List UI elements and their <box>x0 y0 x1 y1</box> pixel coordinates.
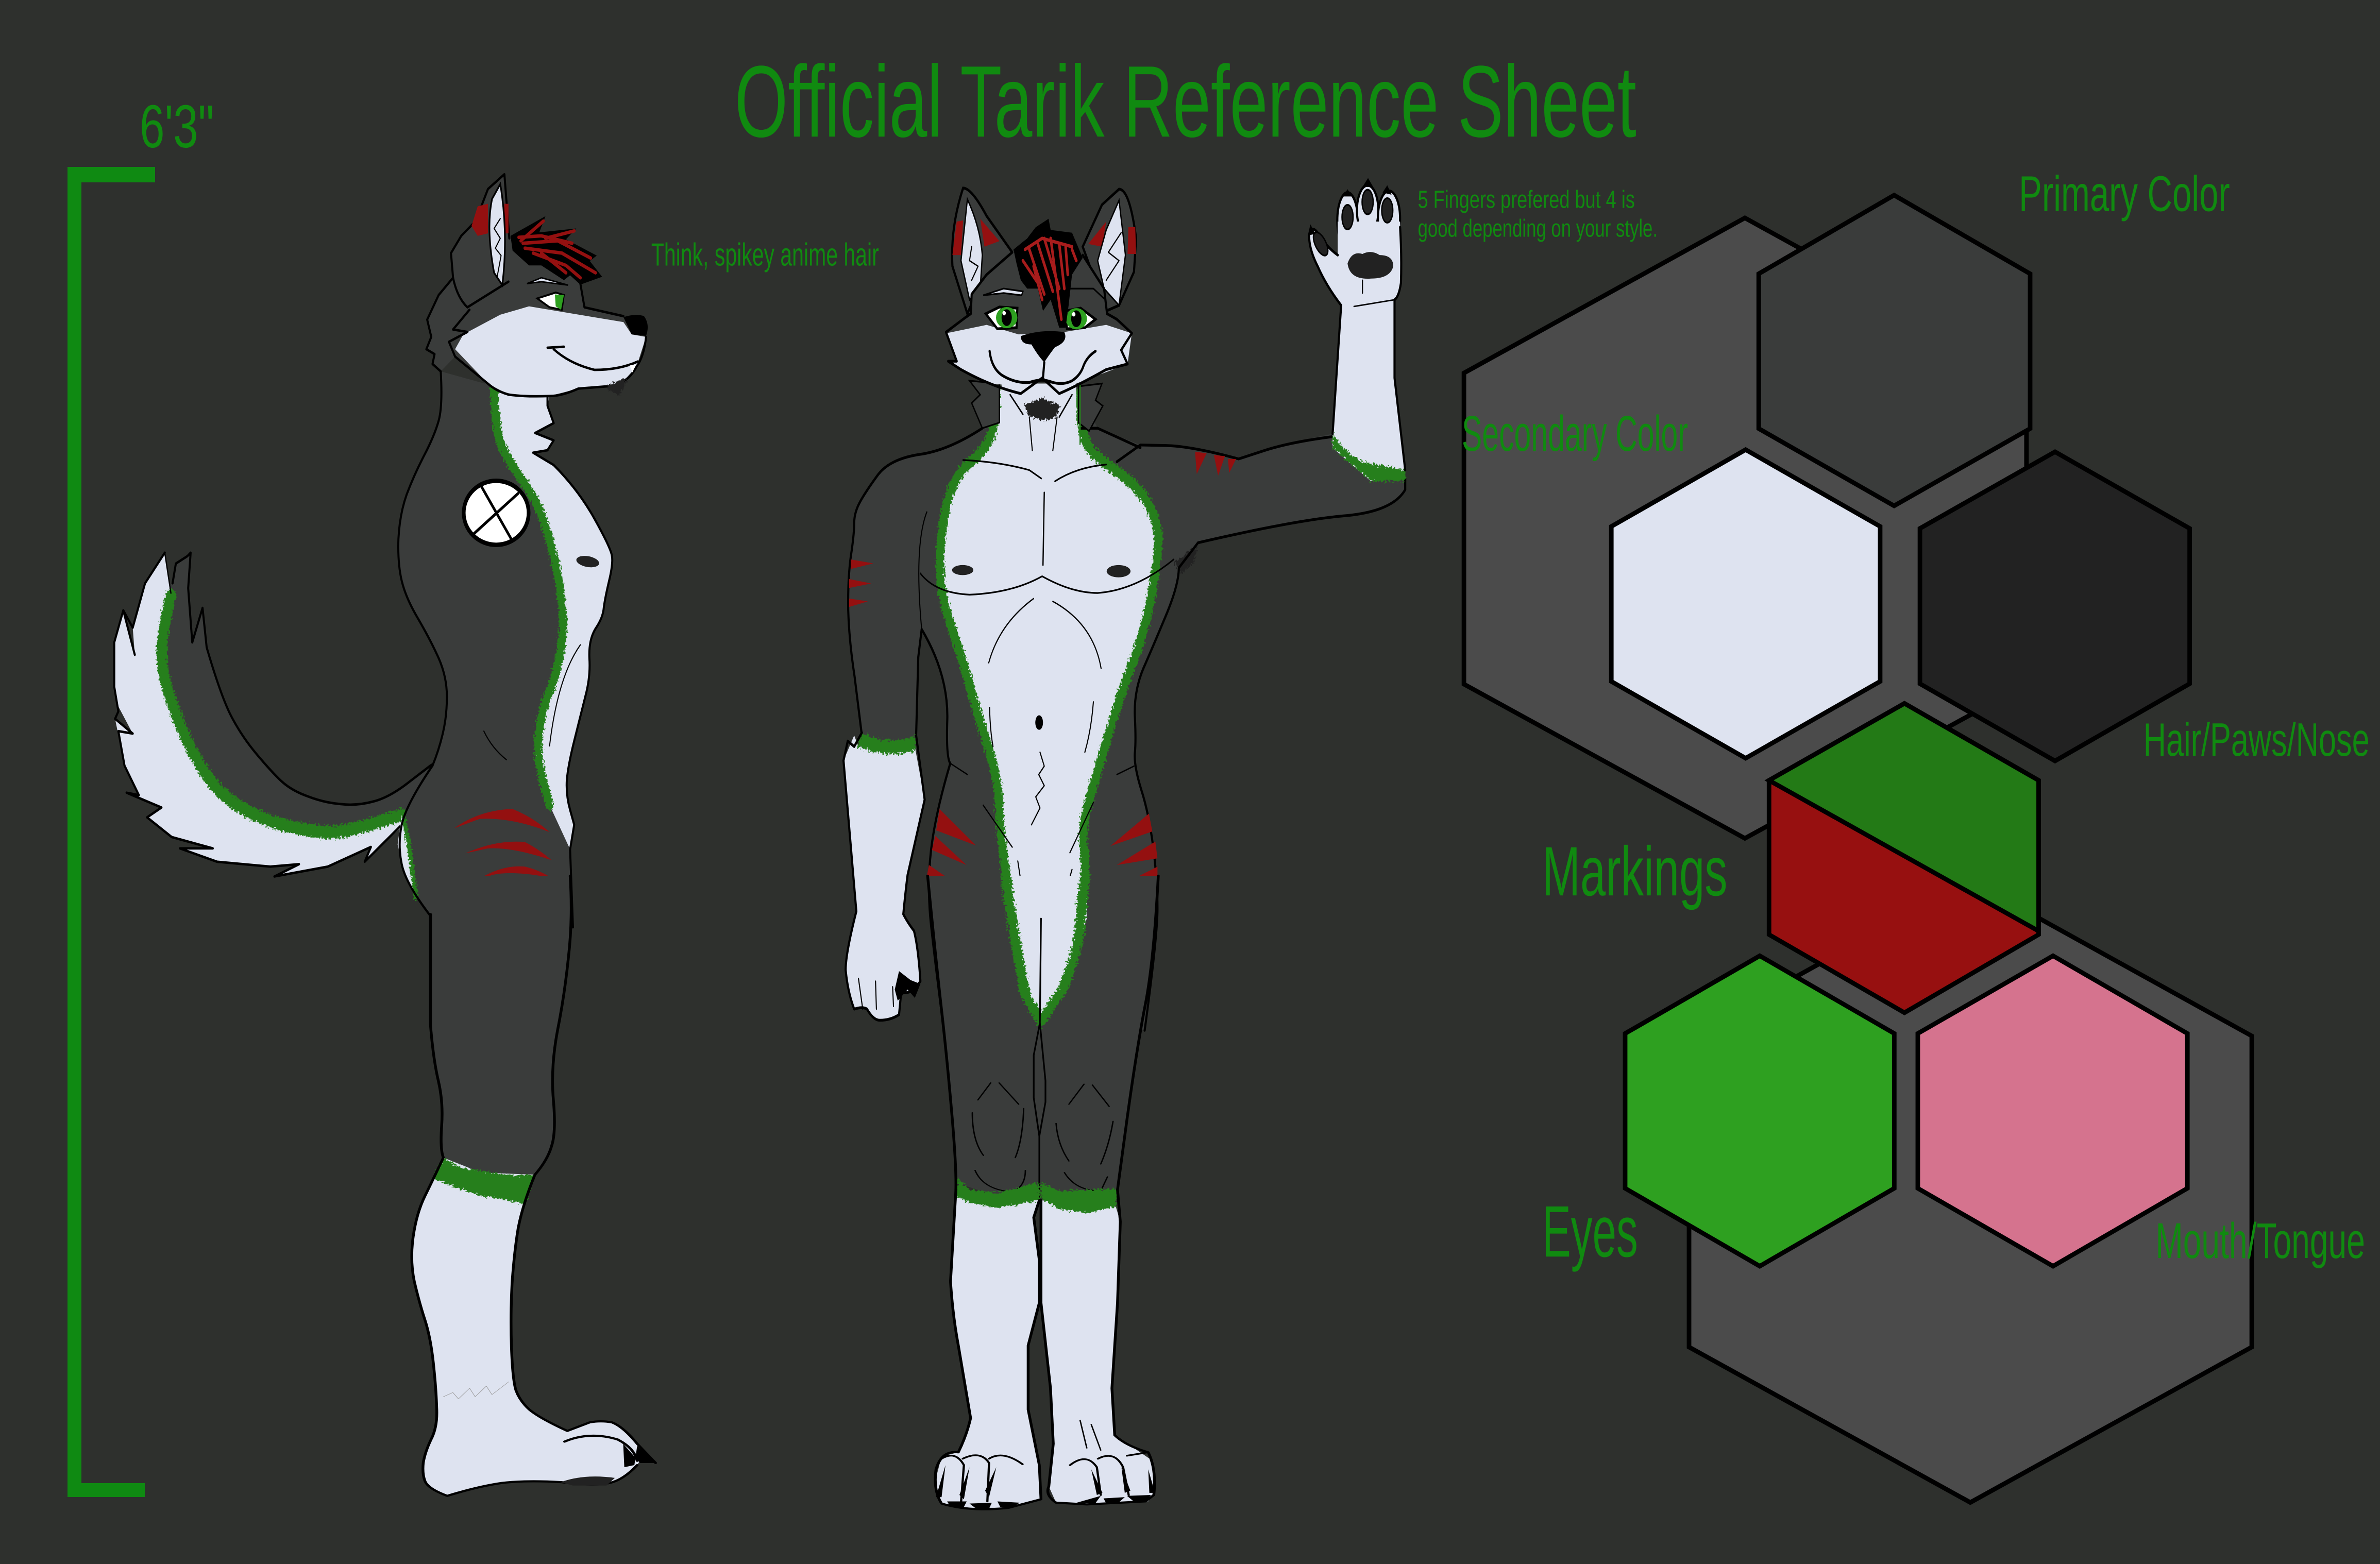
right ear <box>1083 189 1136 311</box>
neck fur left and right <box>970 381 1103 431</box>
hexagon: hair paws nose <box>1920 452 2190 761</box>
front raised forearm and paw <box>1308 178 1405 481</box>
paw claws <box>1308 178 1392 235</box>
side view torso <box>398 371 612 927</box>
front legs <box>927 876 1158 1509</box>
front hair <box>1014 219 1083 328</box>
hexagon: primary colour <box>1759 195 2030 506</box>
side eye <box>527 278 568 310</box>
side goatee <box>607 379 627 395</box>
side view head <box>426 174 648 396</box>
front toes and claws <box>936 1420 1155 1509</box>
palette labels <box>1462 165 2370 1272</box>
side red scratches <box>454 809 552 883</box>
side hair <box>511 216 602 285</box>
note: fingers: good depending on your style. <box>1418 215 1658 243</box>
armpit fur <box>1175 545 1198 574</box>
front torso and arms <box>848 389 1405 1030</box>
goatee <box>1024 398 1060 420</box>
side mouth <box>548 347 638 372</box>
side toe claw <box>623 1444 655 1467</box>
title: Official Tarik Reference Sheet <box>735 44 1636 158</box>
front chest lines <box>919 417 1174 1030</box>
hexagon: lower background <box>1689 880 2252 1503</box>
nipple <box>576 554 600 569</box>
figure: side view <box>114 174 655 1496</box>
label: secondary colour: Secondary Color <box>1462 405 1688 462</box>
front nipples and navel <box>952 565 1130 730</box>
front head <box>946 188 1136 451</box>
hexagon: white <box>1611 450 1880 758</box>
side view tail <box>114 553 454 876</box>
note: spikey hair: Think, spikey anime hair <box>651 237 879 273</box>
side view leg <box>412 876 655 1496</box>
front red scratches <box>849 452 1236 882</box>
height label: 6'3" <box>140 92 214 160</box>
hexagon: secondary background <box>1464 218 2027 838</box>
figure: front view <box>843 178 1405 1509</box>
head shape <box>946 227 1132 345</box>
emblem circle <box>464 481 529 545</box>
label: primary colour: Primary Color <box>2019 165 2230 222</box>
colour palette hexagons <box>1464 195 2252 1503</box>
note: fingers: 5 Fingers prefered but 4 is <box>1418 186 1635 214</box>
hexagon: eyes <box>1625 956 1894 1266</box>
side foot pad <box>561 1476 615 1486</box>
label: eyes: Eyes <box>1542 1191 1638 1272</box>
front brows <box>983 288 1104 299</box>
front mouth <box>990 351 1095 383</box>
fist claws <box>895 971 920 1001</box>
label: markings: Markings <box>1542 832 1728 910</box>
side ear <box>471 184 509 285</box>
hexagon: mouth tongue <box>1918 956 2187 1266</box>
knee lines <box>972 1083 1113 1192</box>
note: fingers <box>1418 186 1658 243</box>
front nose <box>1021 331 1066 362</box>
paw pads <box>1310 190 1393 279</box>
left ear <box>952 188 1012 314</box>
front eyes <box>986 307 1095 329</box>
paw fingers <box>1337 185 1400 248</box>
hexagon: markings <box>1769 703 2038 1013</box>
front lowered forearm and fist <box>843 733 925 1021</box>
height bracket <box>67 167 155 1497</box>
